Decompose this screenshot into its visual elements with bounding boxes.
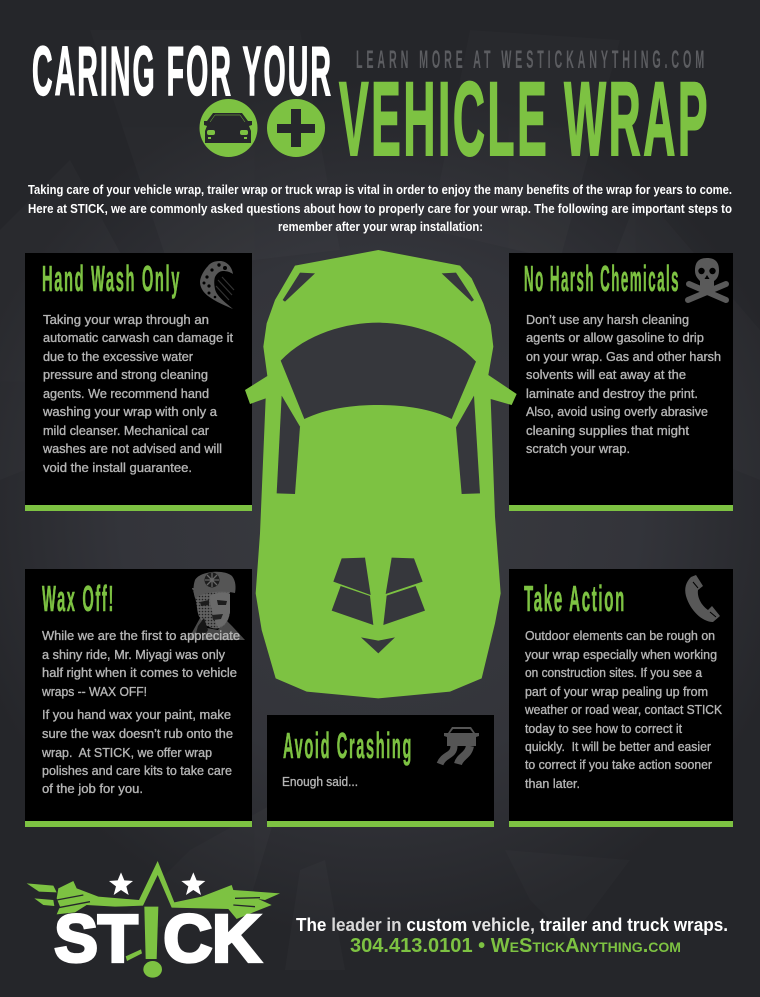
body text: wraps -- WAX OFF! xyxy=(41,684,147,699)
text: CARING FOR YOUR xyxy=(32,32,333,110)
body text: Don’t use any harsh cleaning xyxy=(526,312,689,327)
exclamation mark xyxy=(126,907,162,978)
footer tagline: The leader in custom vehicle, trailer and truck wraps. xyxy=(296,915,728,935)
body text: While we are the first to appreciate xyxy=(42,628,240,643)
body text: a shiny ride, Mr. Miyagi was only xyxy=(42,647,225,662)
body text: part of your wrap pealing up from xyxy=(525,684,708,699)
body text: agents. We recommend hand xyxy=(43,386,209,401)
body text: than later. xyxy=(525,776,580,791)
body text: mild cleanser. Mechanical car xyxy=(43,423,210,438)
panel: avoid crashing xyxy=(267,715,494,827)
body text: on your wrap. Gas and other harsh xyxy=(526,349,721,364)
body text: wrap. At STICK, we offer wrap xyxy=(41,745,212,760)
body text: sure the wax doesn’t rub onto the xyxy=(42,726,233,741)
wings and star outline xyxy=(27,861,280,919)
body text: your wrap especially when working xyxy=(525,647,717,662)
panel: no harsh chemicals xyxy=(509,253,733,511)
intro paragraph xyxy=(28,183,732,234)
icon: Mr. Miyagi portrait xyxy=(188,572,245,640)
logo: STICK xyxy=(27,861,280,978)
body text: washes are not advised and will xyxy=(42,441,222,456)
body text: today to see how to correct it xyxy=(525,721,682,736)
body text: to correct if you take action sooner xyxy=(525,757,713,772)
panel: take action xyxy=(509,569,733,827)
body text: Enough said... xyxy=(282,774,358,789)
body text: polishes and care kits to take care xyxy=(42,763,232,778)
intro paragraph: remember after your wrap installation: xyxy=(278,220,483,234)
body text: Also, avoid using overly abrasive xyxy=(526,404,708,419)
body text: solvents will eat away at the xyxy=(526,367,686,382)
body text: pressure and strong cleaning xyxy=(43,367,208,382)
body text: of the job for you. xyxy=(42,781,143,796)
body text: agents or allow gasoline to drip xyxy=(526,330,704,345)
body text: scratch your wrap. xyxy=(526,441,630,456)
body text xyxy=(42,312,233,475)
body text: half right when it comes to vehicle xyxy=(42,665,237,680)
body text: automatic carwash can damage it xyxy=(43,330,233,345)
icon: brush xyxy=(200,261,234,309)
panel: wax off: Wax Off! xyxy=(42,578,115,619)
body text: If you hand wax your paint, make xyxy=(42,707,231,722)
body text: due to the excessive water xyxy=(43,349,194,364)
body text: Outdoor elements can be rough on xyxy=(525,628,715,643)
body text: void the install guarantee. xyxy=(43,460,192,475)
body text xyxy=(41,628,240,796)
footer contact: 304.413.0101 • WeStickAnything.com xyxy=(350,935,681,957)
icon: skull and crossbones xyxy=(688,258,726,300)
body text: laminate and destroy the print. xyxy=(526,386,698,401)
panel: avoid crashing: Avoid Crashing xyxy=(283,725,413,766)
panel: wax off xyxy=(25,569,252,827)
body text: Taking your wrap through an xyxy=(43,312,209,327)
illustration: green car top view xyxy=(245,250,517,698)
stars xyxy=(109,872,205,895)
body text xyxy=(524,628,722,791)
panel: hand wash only: Hand Wash Only xyxy=(42,258,181,299)
icon: plus in circle xyxy=(267,99,325,157)
body text: quickly. It will be better and easier xyxy=(525,739,712,754)
icon: phone xyxy=(685,575,720,622)
body text: cleaning supplies that might xyxy=(526,423,689,438)
body text: washing your wrap with only a xyxy=(42,404,218,419)
body text: weather or road wear, contact STICK xyxy=(524,702,722,717)
panel: hand wash only xyxy=(25,253,252,511)
icon: car in circle xyxy=(200,99,258,157)
wordmark: ST xyxy=(54,903,138,977)
body text: on construction sites. If you see a xyxy=(525,665,703,680)
icon: skidding car xyxy=(440,727,479,764)
body text xyxy=(526,312,721,456)
logo: STICK: CK xyxy=(163,903,261,977)
